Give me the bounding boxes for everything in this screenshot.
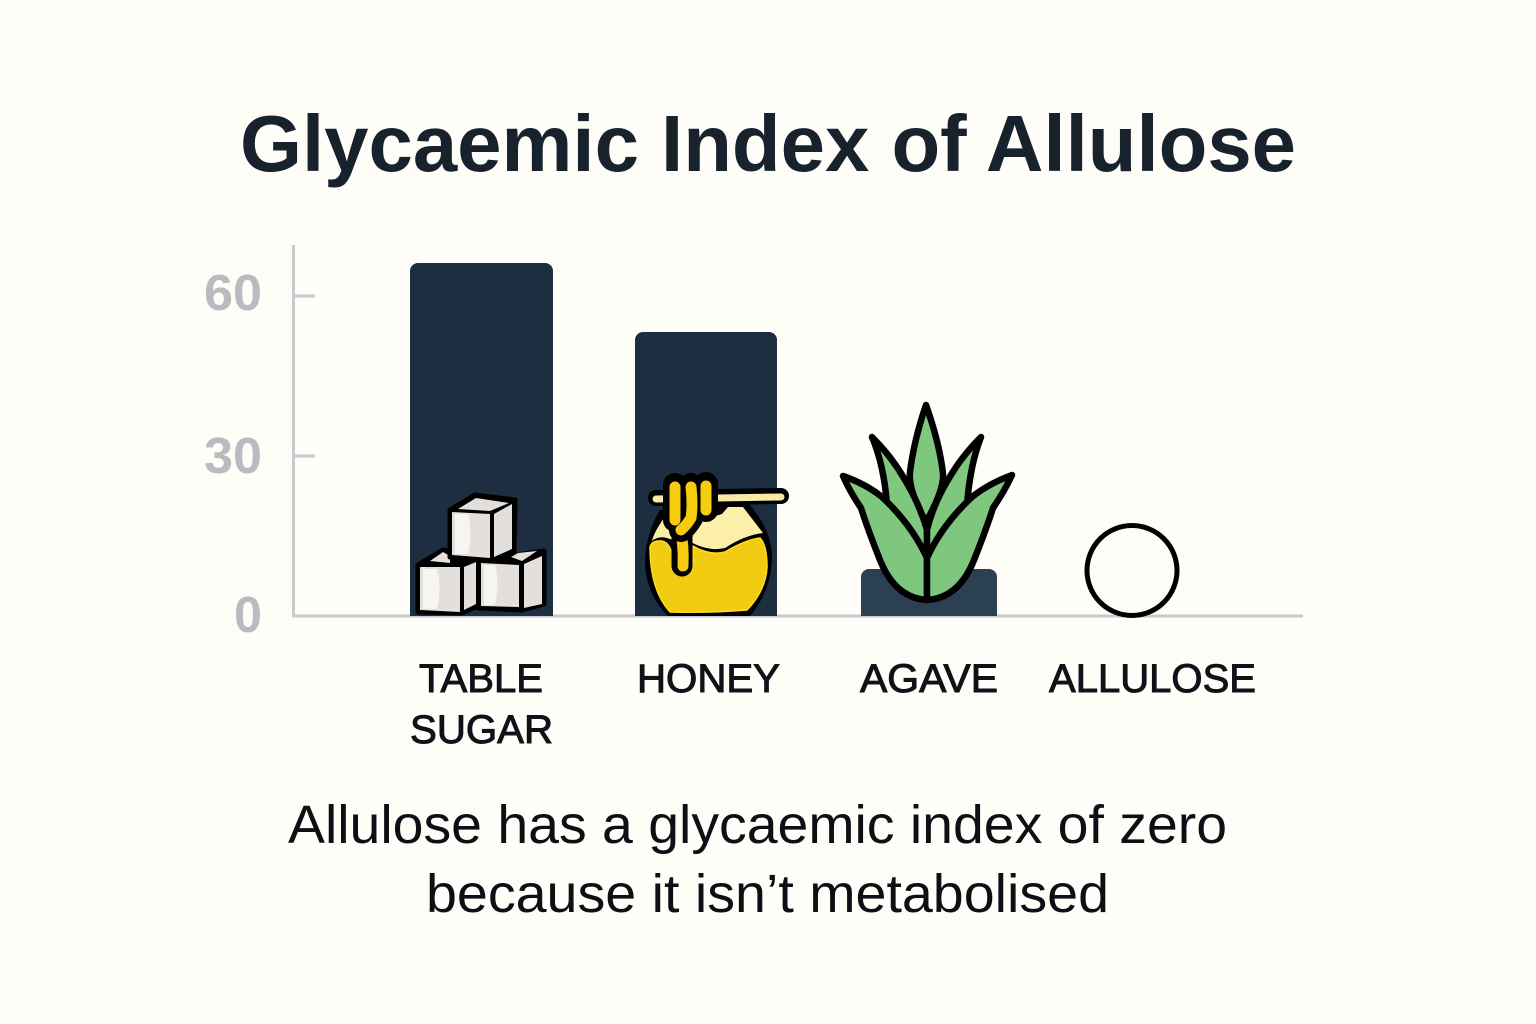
dipper fingers	[675, 484, 706, 530]
label: honey: HONEY	[637, 657, 780, 701]
chart axes	[293, 245, 1303, 616]
honey drip	[672, 532, 692, 566]
label: allulose: ALLULOSE	[1049, 657, 1256, 701]
caption	[288, 795, 1227, 924]
pot honey	[650, 538, 767, 612]
caption: because it isn’t metabolised	[426, 864, 1109, 924]
icon: sugar cubes	[418, 495, 544, 613]
label: table sugar: SUGAR	[410, 708, 553, 752]
bar: table sugar	[410, 263, 553, 616]
bar: agave	[861, 569, 997, 616]
y-axis labels: 0	[234, 586, 262, 643]
icon: allulose circle	[1087, 526, 1177, 616]
icon: honey pot	[645, 484, 781, 616]
y-axis labels: 60	[204, 264, 262, 321]
pot upper glass right	[689, 507, 763, 549]
pot upper glass left	[652, 518, 680, 541]
label: table sugar	[410, 657, 553, 752]
bar: honey	[635, 332, 777, 616]
title: Glycaemic Index of Allulose	[240, 99, 1296, 188]
dipper stick	[656, 496, 781, 498]
caption: Allulose has a glycaemic index of zero	[288, 795, 1227, 855]
pot outline	[645, 500, 772, 616]
category labels	[410, 657, 1256, 752]
label: agave: AGAVE	[860, 657, 998, 701]
y-axis labels	[204, 264, 262, 643]
label: table sugar: TABLE	[419, 657, 543, 701]
y-axis labels: 30	[204, 427, 262, 484]
icon: agave plant	[843, 405, 1012, 600]
